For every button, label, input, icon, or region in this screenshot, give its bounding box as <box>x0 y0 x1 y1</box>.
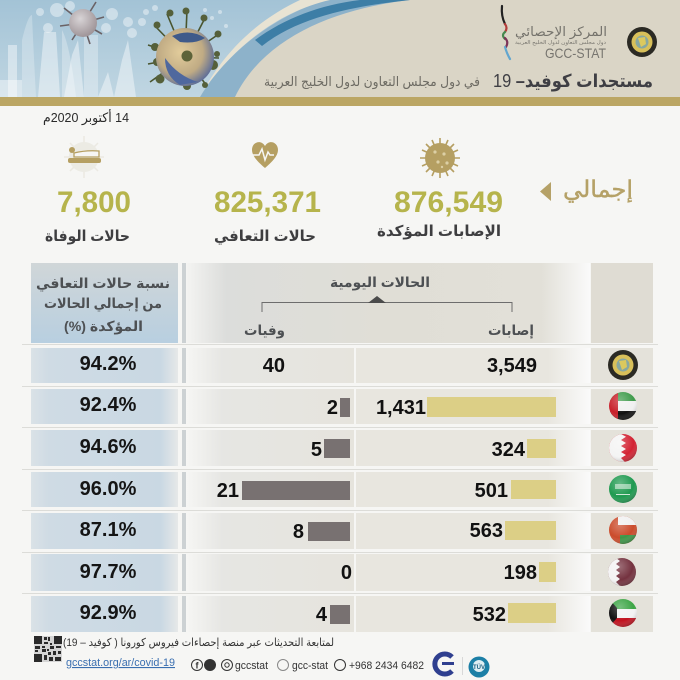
stat: recovered: حالات التعافي <box>214 228 316 245</box>
social icons and contacts: gcc-stat <box>292 660 328 672</box>
table header: إصابات <box>488 322 534 339</box>
footer text: لمتابعة التحديثات عبر منصة إحصاءات فيروس كورونا ( كوفيد – 19) <box>63 637 334 649</box>
icon: UAE flag <box>609 392 637 420</box>
icon: heart <box>252 142 278 168</box>
bar chart: cases: 324 <box>492 439 526 461</box>
emblem: GCC <box>627 27 657 57</box>
stat: recovered: 825,371 <box>214 186 321 219</box>
stat: confirmed: الإصابات المؤكدة <box>377 223 501 240</box>
bar chart: cases: 532 <box>473 604 506 626</box>
stat: deaths: 7,800 <box>57 186 131 219</box>
stat: deaths <box>45 186 131 245</box>
bar chart: deaths: 40 <box>263 355 285 377</box>
recovery rate values: 92.4% <box>80 394 137 416</box>
bar chart: cases: 198 <box>504 562 537 584</box>
stat: deaths: حالات الوفاة <box>45 228 130 245</box>
swoosh <box>200 0 410 97</box>
social icons and contacts <box>192 659 424 672</box>
icon: virus <box>420 138 460 178</box>
gold band <box>0 97 680 106</box>
icon: grey virus <box>60 2 104 44</box>
bar chart: deaths <box>217 355 352 626</box>
table header: من إجمالي الحالات <box>44 295 162 312</box>
recovery rate values: 87.1% <box>80 519 137 541</box>
recovery rate values <box>80 353 137 624</box>
bar chart: deaths: 21 <box>217 480 239 502</box>
logo: G mark <box>435 654 454 674</box>
icon: Kuwait flag <box>609 599 637 627</box>
bar chart: cases: 1,431 <box>376 397 426 419</box>
table header: الحالات اليومية <box>330 274 430 291</box>
icon: Saudi flag <box>609 475 637 503</box>
logo: GCC-STAT: دول مجلس التعاون لدول الخليج العربية <box>515 40 606 46</box>
stat: recovered <box>214 186 321 245</box>
stat: confirmed: 876,549 <box>394 186 503 219</box>
header banner <box>0 0 680 97</box>
logo: GCC-STAT: المركز الإحصائي <box>515 24 607 40</box>
table header: نسبة حالات التعافي <box>36 275 170 292</box>
bar chart: cases <box>376 355 556 626</box>
logo: TUV <box>468 656 490 678</box>
recovery rate values: 96.0% <box>80 478 137 500</box>
skyline <box>0 1 228 97</box>
QR code <box>34 636 62 662</box>
social icons and contacts: f <box>196 660 200 670</box>
bar chart: deaths: 8 <box>293 521 304 543</box>
icon: patient <box>64 136 104 178</box>
stat: confirmed <box>377 186 503 240</box>
heading: total: إجمالي <box>563 176 633 203</box>
table rows background <box>31 348 653 632</box>
recovery rate values: 94.6% <box>80 436 137 458</box>
icon: Bahrain flag <box>609 434 637 462</box>
social icons and contacts: +968 2434 6482 <box>349 660 424 672</box>
logo: GCC-STAT: GCC-STAT <box>545 45 606 61</box>
logo: TUV: TÜV <box>473 664 485 671</box>
icon: Qatar flag <box>608 558 636 586</box>
icon: Oman flag <box>609 516 637 544</box>
icon: globe virus <box>148 8 222 90</box>
arrow <box>540 182 551 201</box>
social icons and contacts: gccstat <box>235 660 268 672</box>
icon: GCC emblem <box>608 350 638 380</box>
recovery rate values: 97.7% <box>80 561 137 583</box>
bar chart: cases: 501 <box>475 480 508 502</box>
title: مستجدات كوفيد– 19 <box>493 71 653 92</box>
table header <box>31 263 653 343</box>
logo: GCC-STAT <box>502 6 607 61</box>
recovery rate values: 92.9% <box>80 602 137 624</box>
bar chart: cases: 3,549 <box>487 355 537 377</box>
link: gccstat.org/ar/covid-19 <box>66 657 175 669</box>
bar chart: deaths: 0 <box>341 562 352 584</box>
date: 14 أكتوبر 2020م <box>43 109 129 126</box>
table header: وفيات <box>244 322 285 339</box>
bar chart: deaths: 5 <box>311 439 322 461</box>
bar chart: cases: 563 <box>470 520 503 542</box>
table header: المؤكدة (%) <box>64 318 143 335</box>
recovery rate values: 94.2% <box>80 353 137 375</box>
subtitle: في دول مجلس التعاون لدول الخليج العربية <box>264 74 480 90</box>
bar chart: deaths: 2 <box>327 397 338 419</box>
table <box>22 263 658 632</box>
bar chart: deaths: 4 <box>316 604 328 626</box>
